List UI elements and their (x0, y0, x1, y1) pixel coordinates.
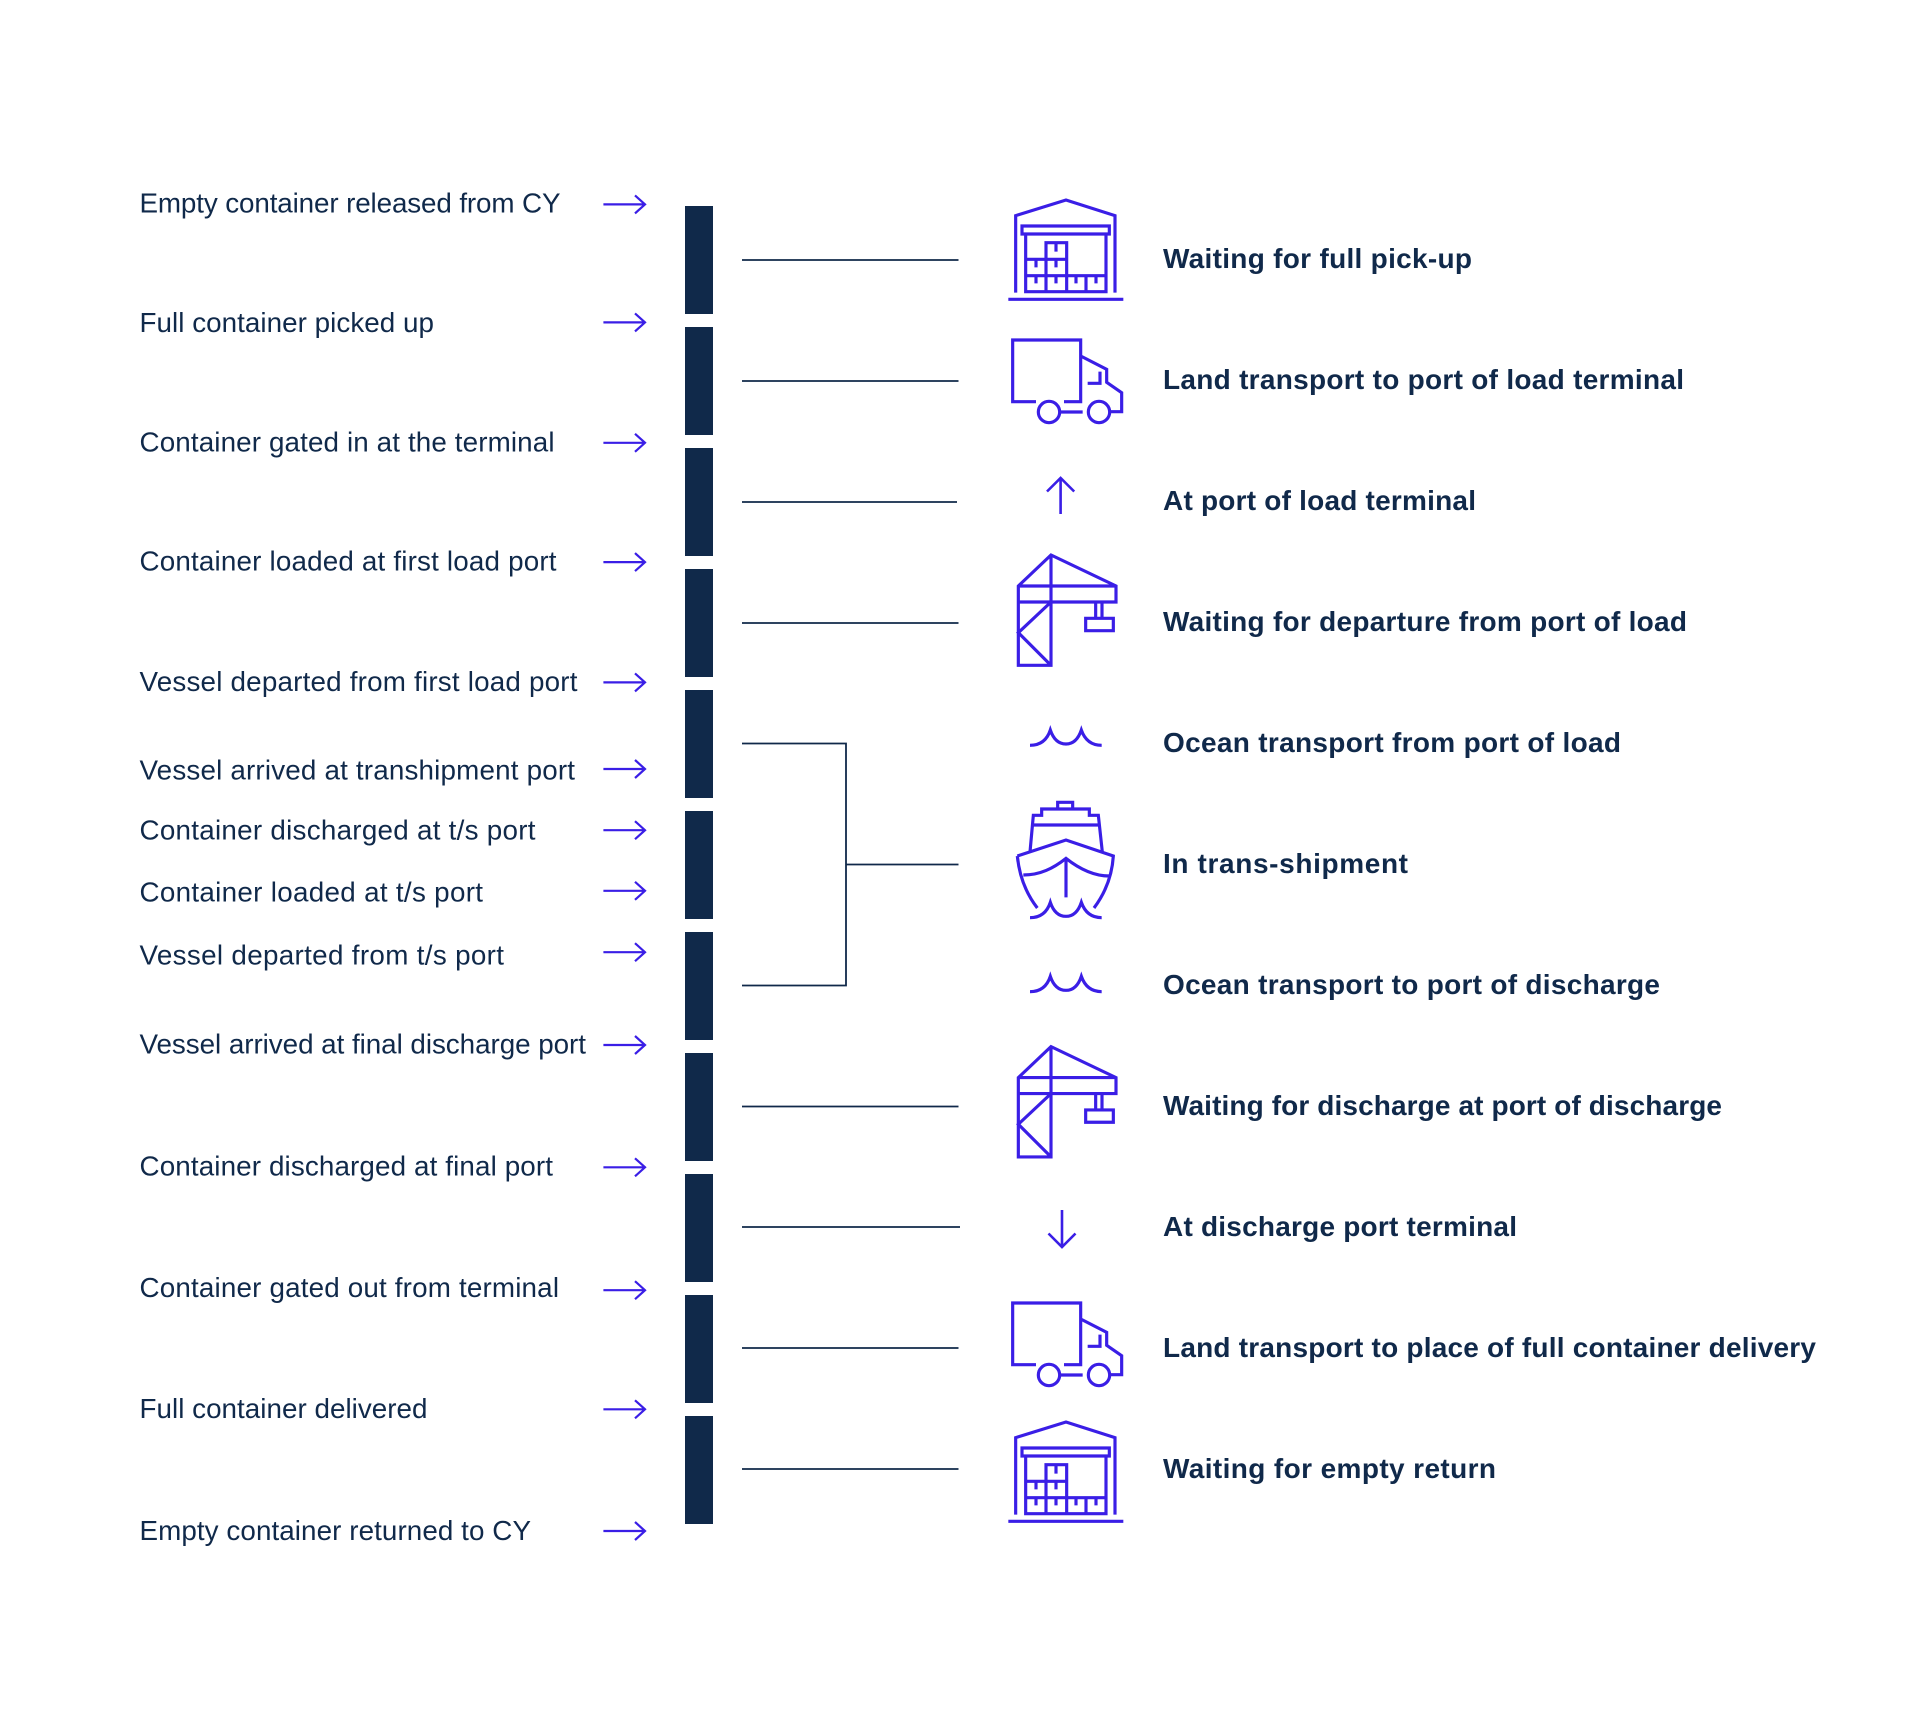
milestone: empty container released: Empty container released from CY (140, 188, 560, 218)
milestone: departed first load port: Vessel departed from first load port (140, 666, 578, 697)
milestone: gated out: Container gated out from terminal (140, 1272, 559, 1303)
milestone: full container picked up: Full container picked up (140, 307, 434, 338)
icon: crane (1018, 1047, 1116, 1157)
stage label: waiting for departure: Waiting for departure from port of load (1163, 606, 1687, 637)
milestone: loaded at first load port: Container loaded at first load port (140, 546, 557, 576)
stage label: at discharge port terminal: At discharge port terminal (1163, 1211, 1517, 1242)
stage label: land transport to load terminal: Land transport to port of load terminal (1163, 364, 1684, 395)
milestone: loaded at t/s port: Container loaded at t/s port (140, 876, 483, 908)
milestone: full container picked up (140, 307, 645, 338)
milestone: arrived at final discharge port: Vessel arrived at final discharge port (140, 1028, 586, 1060)
icon: truck (1013, 1303, 1122, 1386)
icon: warehouse (1008, 1422, 1123, 1521)
stage label: ocean transport to discharge: Ocean transport to port of discharge (1163, 969, 1660, 1000)
stage label: waiting for discharge: Waiting for discharge at port of discharge (1163, 1090, 1722, 1121)
milestone: full container delivered: Full container delivered (140, 1393, 428, 1424)
milestone: loaded at t/s port (140, 876, 645, 908)
icon: up arrow (1047, 478, 1074, 514)
milestone: gated in: Container gated in at the terminal (140, 426, 554, 458)
timeline bars (685, 206, 713, 1524)
icon: waves (1030, 976, 1102, 992)
connector lines (742, 260, 960, 1469)
milestone: arrived at transhipment port: Vessel arrived at transhipment port (140, 754, 575, 786)
stage label: waiting for full pick-up: Waiting for full pick-up (1163, 243, 1472, 274)
icon: ship (1017, 802, 1113, 918)
milestone: full container delivered (140, 1393, 645, 1424)
stage label: ocean transport from load: Ocean transport from port of load (1163, 727, 1621, 758)
stage label: in trans-shipment: In trans-shipment (1163, 848, 1408, 879)
icon: crane (1018, 555, 1116, 665)
icon: warehouse (1008, 200, 1123, 299)
stage label: land transport to delivery: Land transport to place of full container delivery (1163, 1332, 1816, 1363)
stage label: waiting for empty return: Waiting for empty return (1163, 1453, 1496, 1484)
milestone: empty container returned: Empty container returned to CY (140, 1515, 531, 1546)
icon: truck (1013, 340, 1122, 423)
milestone: discharged at t/s port: Container discharged at t/s port (140, 814, 536, 846)
panel: event milestones (140, 188, 645, 1546)
icon: down arrow (1048, 1210, 1076, 1247)
icon: waves (1030, 730, 1102, 745)
milestone: departed from t/s port: Vessel departed from t/s port (140, 940, 504, 970)
stage label: at port of load terminal: At port of load terminal (1163, 485, 1476, 516)
milestone: discharged at final port: Container discharged at final port (140, 1150, 553, 1182)
panel: stages with icons (1008, 200, 1816, 1521)
